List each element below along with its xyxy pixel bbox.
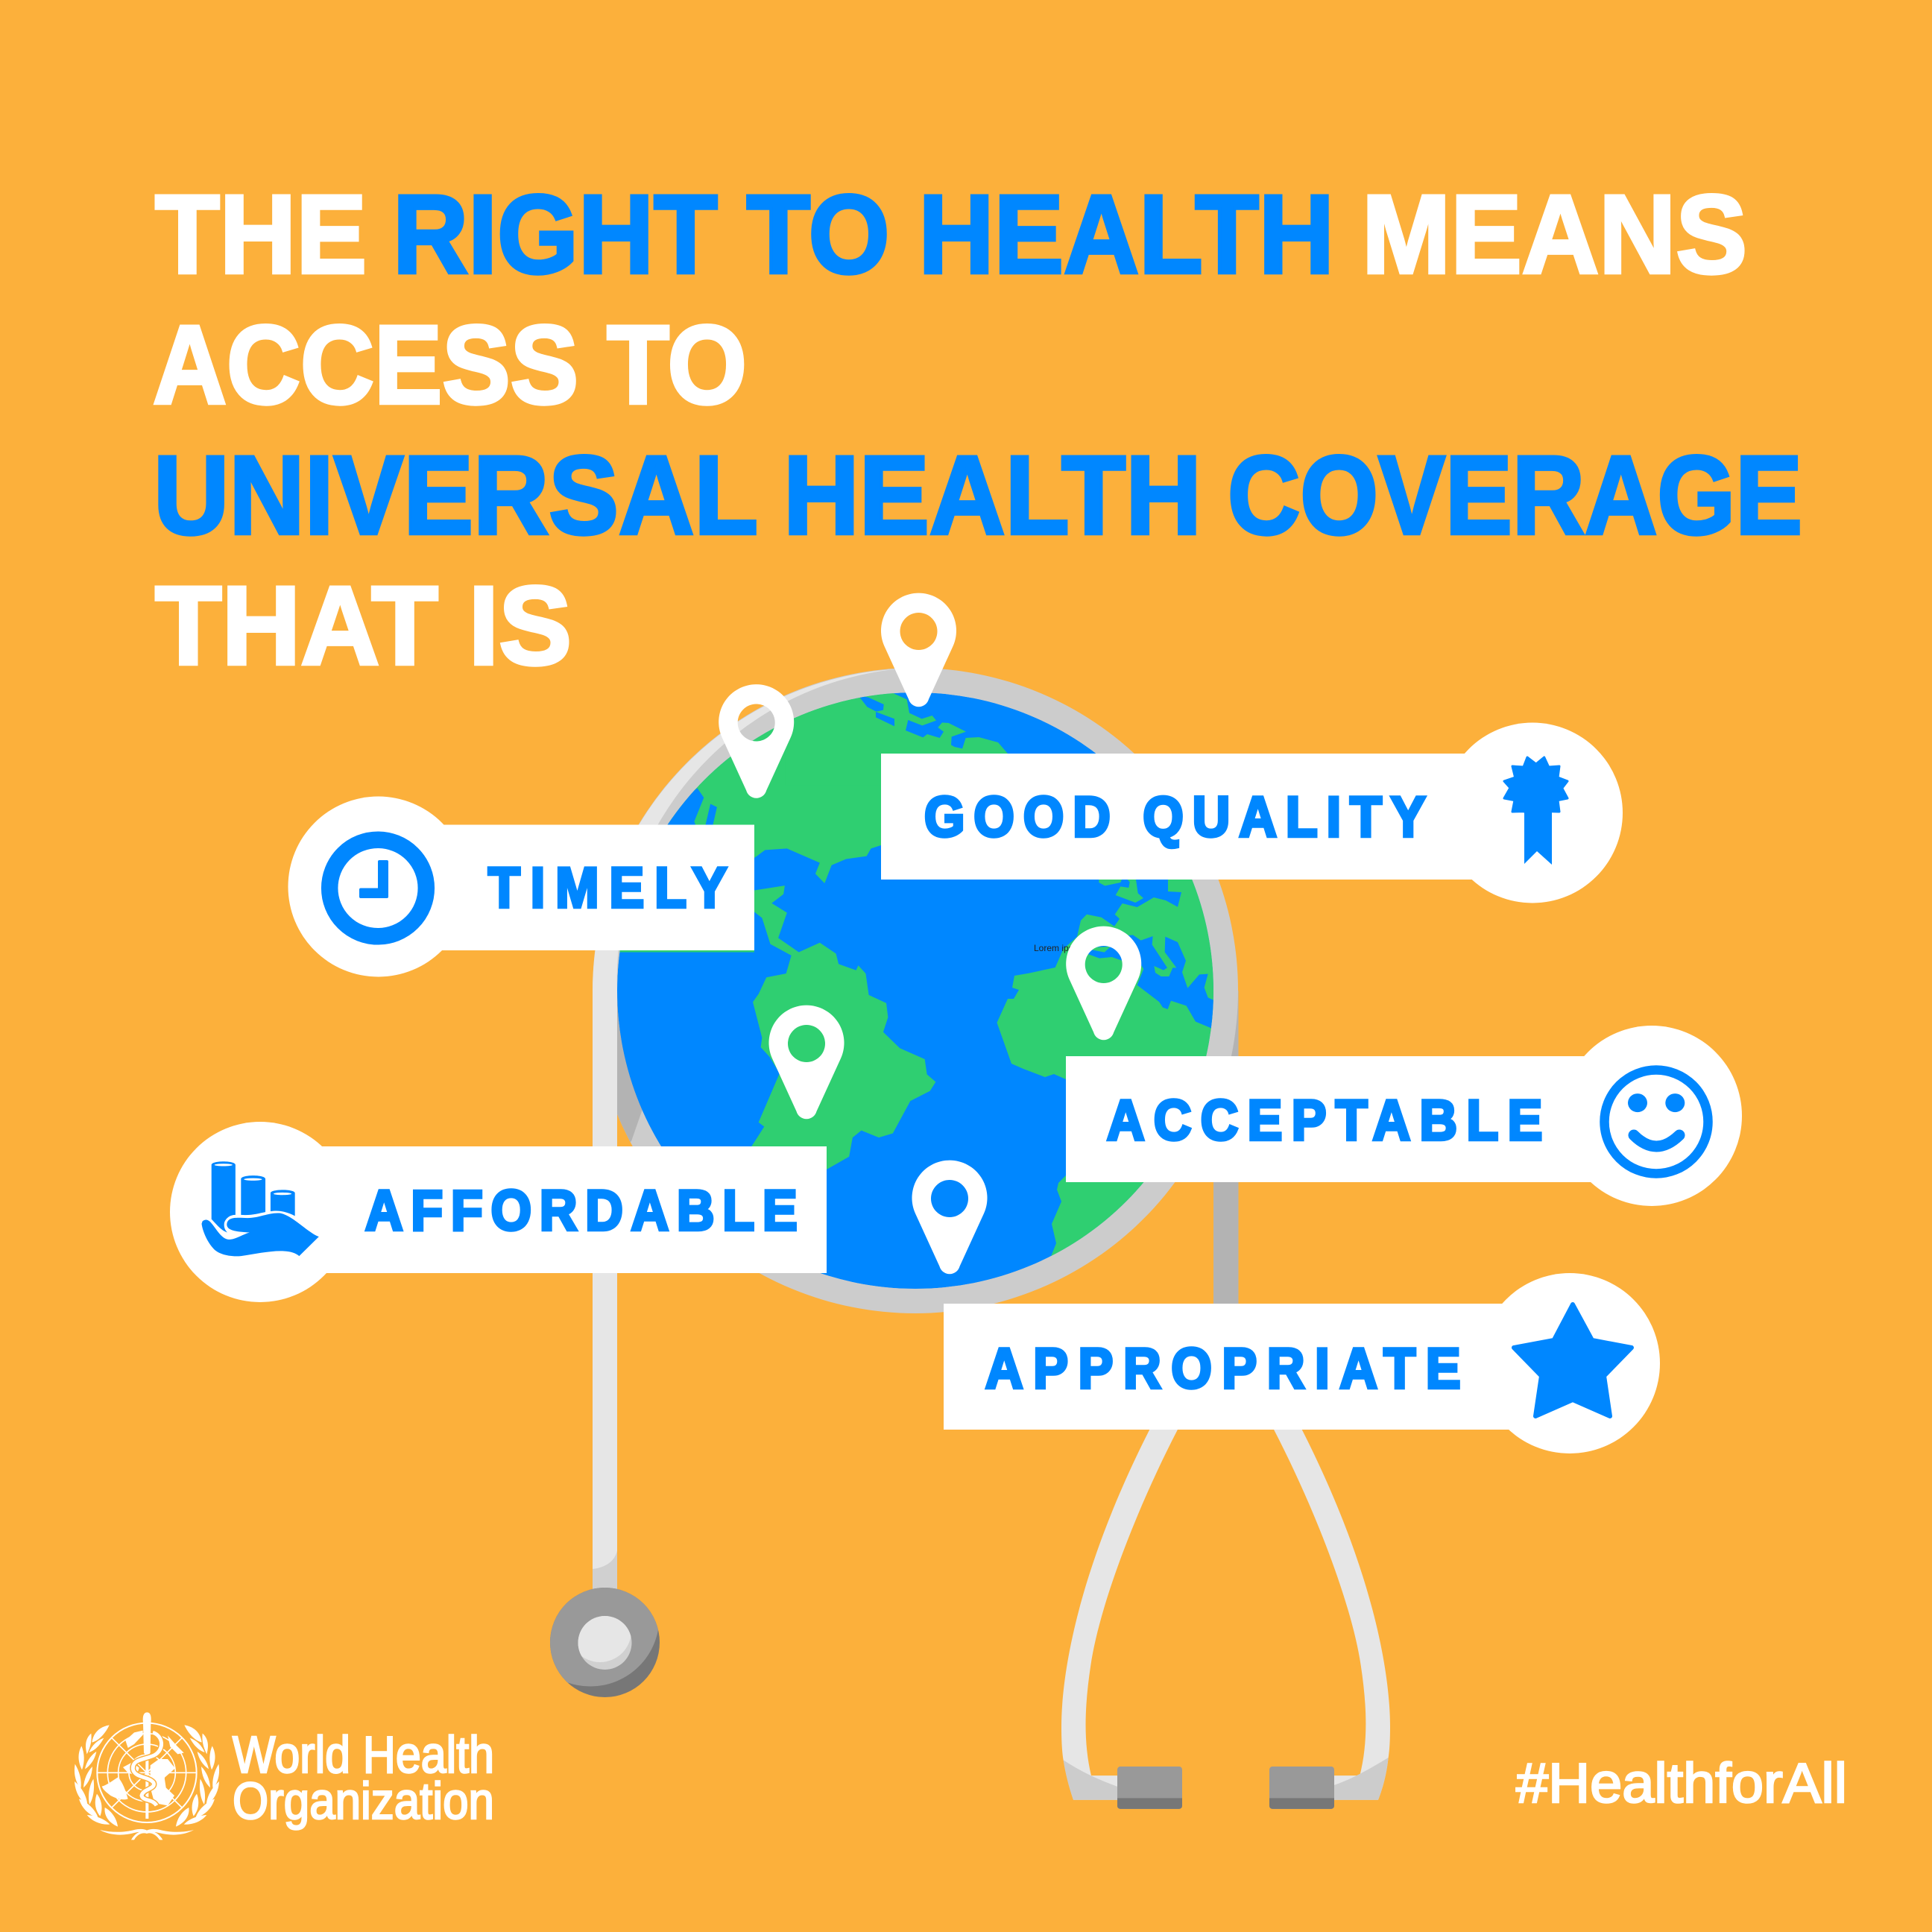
stethoscope ear tubes [1061,1430,1390,1809]
north america [619,699,962,953]
label: appropriate: APPROPRIATE [985,1337,1461,1401]
label: timely [288,796,754,976]
globe ring [593,668,1238,1313]
left earpiece [1117,1767,1182,1809]
stethoscope tube: left side [593,991,617,1591]
emblem wreath left [75,1725,118,1827]
europe and africa [997,880,1213,1257]
label: good quality [881,723,1623,903]
hashtag: #HealthforAll [1516,1752,1847,1814]
label: affordable: AFFORDABLE [365,1179,798,1243]
label: acceptable [1066,1026,1742,1206]
globe [617,692,1213,1289]
map pin: south america [769,1006,844,1119]
title: THAT IS [155,563,572,688]
label: affordable [170,1122,827,1302]
emblem continents [102,1735,184,1805]
map pin: upper left [719,684,794,798]
logo: WHO emblem [75,1712,219,1840]
icon: star [1514,1304,1632,1416]
stethoscope arc highlight [593,669,896,991]
map pin: top [881,593,956,707]
stethoscope chest piece [550,1588,660,1697]
icon: smiley [1604,1070,1708,1173]
emblem wreath right [176,1725,219,1827]
title: HEALTH [783,432,1202,558]
title: ACCESS TO [153,302,747,427]
icon: clock [329,840,426,936]
map pin: bottom [912,1161,987,1274]
logo text: World Health Organization: World Health [233,1726,494,1784]
arctic islands [794,693,1008,754]
logo text: World Health Organization: Organization [233,1772,494,1830]
central and south america [751,886,935,1199]
logo text: World Health Organization [233,1726,494,1830]
label: good quality: GOOD QUALITY [924,786,1426,849]
label: timely: TIMELY [488,856,727,920]
right earpiece [1269,1767,1334,1809]
stethoscope tube: right side [1213,991,1239,1319]
emblem staff and serpent [125,1712,162,1819]
title [153,171,1802,688]
map pin: africa [1066,926,1141,1040]
icon: rosette [1504,757,1568,865]
title: THE [155,171,367,297]
label: acceptable: ACCEPTABLE [1107,1089,1542,1152]
title: COVERAGE [1228,432,1802,558]
placeholder text: Lorem ipsum [1034,943,1085,953]
title: UNIVERSAL [154,432,758,558]
icon: hand holding coins [202,1161,319,1256]
title: MEANS [1362,171,1747,297]
emblem ribbon [100,1829,194,1840]
label: appropriate [944,1273,1660,1453]
title: RIGHT TO HEALTH [393,171,1334,297]
